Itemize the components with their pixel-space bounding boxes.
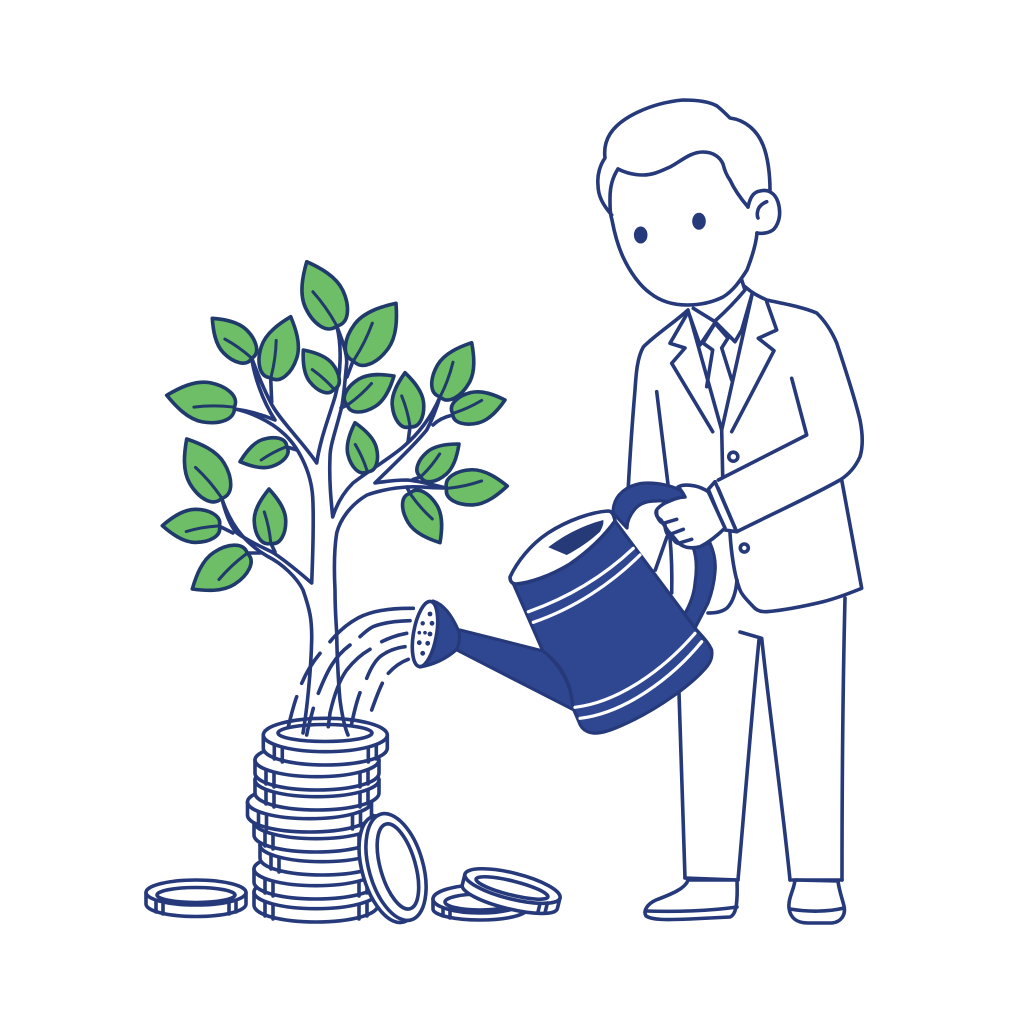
can body [513, 521, 712, 733]
lower coin [433, 885, 527, 920]
spout [455, 630, 574, 710]
coin 2 [255, 743, 379, 790]
hand [656, 485, 725, 548]
twig stems [219, 361, 453, 553]
face [610, 169, 757, 305]
watering can [408, 483, 715, 733]
coin 4 [248, 785, 372, 832]
tie [703, 323, 732, 387]
collar [688, 280, 752, 345]
hair [598, 100, 770, 215]
coin 1 top [263, 718, 387, 765]
ear inner [757, 202, 767, 218]
water stream [288, 608, 413, 735]
right shoe [789, 880, 844, 923]
leaf [292, 341, 346, 398]
leaf [288, 253, 356, 335]
jacket [628, 287, 862, 613]
leaves [162, 253, 509, 605]
ear [748, 190, 780, 233]
coin 8 [254, 875, 378, 922]
single coin left [146, 880, 246, 916]
jacket hem [730, 480, 862, 612]
spout head [420, 601, 459, 667]
can opening [510, 511, 615, 584]
coin 3 [255, 763, 379, 810]
leaf [253, 311, 308, 384]
leaf [448, 385, 509, 429]
lapels [670, 293, 777, 432]
leaf [341, 419, 382, 476]
handle [613, 483, 715, 628]
coin pile right [433, 862, 563, 920]
leaf [162, 509, 220, 543]
coin 6 [260, 828, 384, 875]
hairline [618, 152, 748, 207]
lower button [740, 544, 748, 552]
leaf [336, 291, 413, 373]
leaf [411, 433, 468, 488]
leaf [182, 537, 258, 605]
leaf [236, 433, 291, 475]
head [598, 100, 780, 305]
leaf [201, 307, 264, 370]
tree trunk and branches [219, 326, 453, 735]
leaf [395, 484, 454, 551]
leaf [424, 334, 487, 406]
jacket button [729, 452, 738, 461]
coin 5 [254, 805, 378, 852]
upper coin [459, 862, 563, 920]
left eye [634, 226, 648, 244]
leaf [339, 362, 402, 419]
coin stack [248, 718, 387, 922]
trousers [679, 598, 845, 880]
left shoe [645, 880, 737, 920]
leaf [170, 429, 239, 509]
leaf [253, 489, 286, 544]
cuff [708, 482, 737, 532]
leaf [389, 371, 426, 429]
right eye [692, 213, 706, 230]
spout face [408, 600, 442, 668]
leaf [446, 468, 508, 506]
hand and cuff [656, 482, 737, 548]
can interior [548, 520, 603, 555]
person [598, 100, 862, 923]
can bands [528, 548, 702, 718]
fingers [657, 512, 692, 543]
leaf [163, 376, 238, 427]
leaning coin [348, 807, 437, 929]
coin 7 [254, 852, 378, 899]
